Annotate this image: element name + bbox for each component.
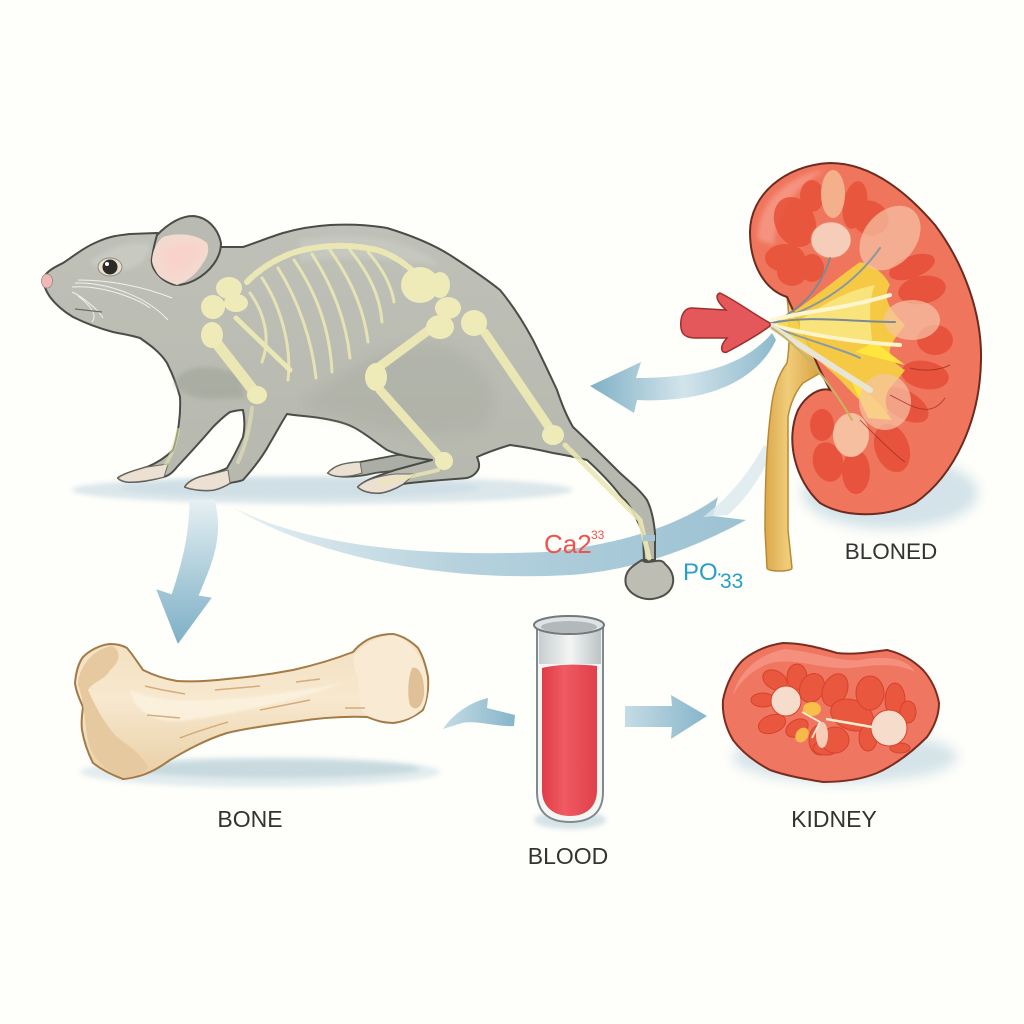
- upper lobes: [765, 179, 895, 286]
- bone shaft grain: [145, 679, 365, 738]
- bone shadow: [80, 757, 440, 787]
- lobes: [751, 664, 916, 755]
- large kidney: [750, 163, 981, 514]
- mouse whiskers: [72, 280, 172, 322]
- bone shaft highlight: [130, 682, 345, 721]
- label: BLOOD: BLOOD: [528, 843, 608, 869]
- mouse skeleton: [165, 246, 649, 558]
- blood: [542, 665, 597, 816]
- mouse: [42, 216, 673, 599]
- papilla bottom: [833, 413, 869, 457]
- mouse body: [43, 225, 655, 560]
- arrow: bone to blood: [443, 698, 515, 729]
- label: Ca2: 33: [591, 528, 605, 542]
- tube rim: [534, 616, 604, 634]
- kidney highlight: [758, 170, 825, 245]
- collecting ducts: [772, 248, 900, 420]
- renal artery: [681, 293, 770, 352]
- pale calyces: [847, 194, 940, 430]
- label: PO: [683, 559, 743, 593]
- ureter: [765, 297, 822, 571]
- mouse body shading: [300, 343, 494, 435]
- papilla top: [811, 170, 851, 258]
- highlight: [733, 649, 915, 695]
- bone: [75, 634, 428, 779]
- kidney outer: [750, 163, 981, 514]
- mouse eye: [98, 258, 122, 276]
- label: PO: PO: [683, 559, 718, 586]
- yellow medulla: [775, 262, 905, 412]
- label: PO: 33: [720, 570, 743, 593]
- yellow accents: [803, 702, 821, 716]
- mouse ear: [152, 216, 221, 285]
- pale tail band: [643, 535, 655, 541]
- kidney tissue divider lines: [860, 365, 950, 462]
- bone spongy end left: [78, 646, 148, 778]
- hind leg bones: [372, 327, 433, 372]
- kidney shadow: [802, 457, 978, 529]
- arrow: long sweep from mouse to kidney: [232, 445, 772, 576]
- mouse mouth: [75, 309, 102, 312]
- mouse feet: [118, 462, 415, 493]
- bone head right: [353, 635, 427, 722]
- tube: [826, 719, 872, 727]
- ribs: [250, 250, 394, 380]
- small kidney: [723, 643, 939, 782]
- label: BLONED: BLONED: [845, 539, 937, 564]
- label: KIDNEY: KIDNEY: [791, 806, 877, 832]
- mouse ground shadow: [72, 476, 572, 504]
- mouse tail tip ball: [625, 560, 673, 599]
- test tube shadow: [534, 811, 606, 829]
- shoulder and pelvis joints: [201, 267, 564, 470]
- bone head right end socket: [408, 668, 424, 708]
- papilla: [771, 686, 801, 716]
- arrow: down from mouse to bone: [157, 500, 218, 643]
- mouse nose: [42, 274, 52, 288]
- test tube of blood: [534, 616, 604, 822]
- small kidney shadow: [733, 731, 957, 783]
- foreleg bones: [218, 345, 257, 395]
- label: PO: ·: [716, 563, 723, 585]
- label: Ca2: Ca2: [544, 529, 592, 559]
- outer right lobes: [808, 248, 953, 494]
- arrow: kidney to mouse: [590, 333, 776, 413]
- mouse far rear foot: [328, 455, 440, 477]
- spine: [247, 246, 412, 282]
- arrow: blood to kidney: [625, 695, 707, 739]
- label: BONE: BONE: [217, 806, 283, 832]
